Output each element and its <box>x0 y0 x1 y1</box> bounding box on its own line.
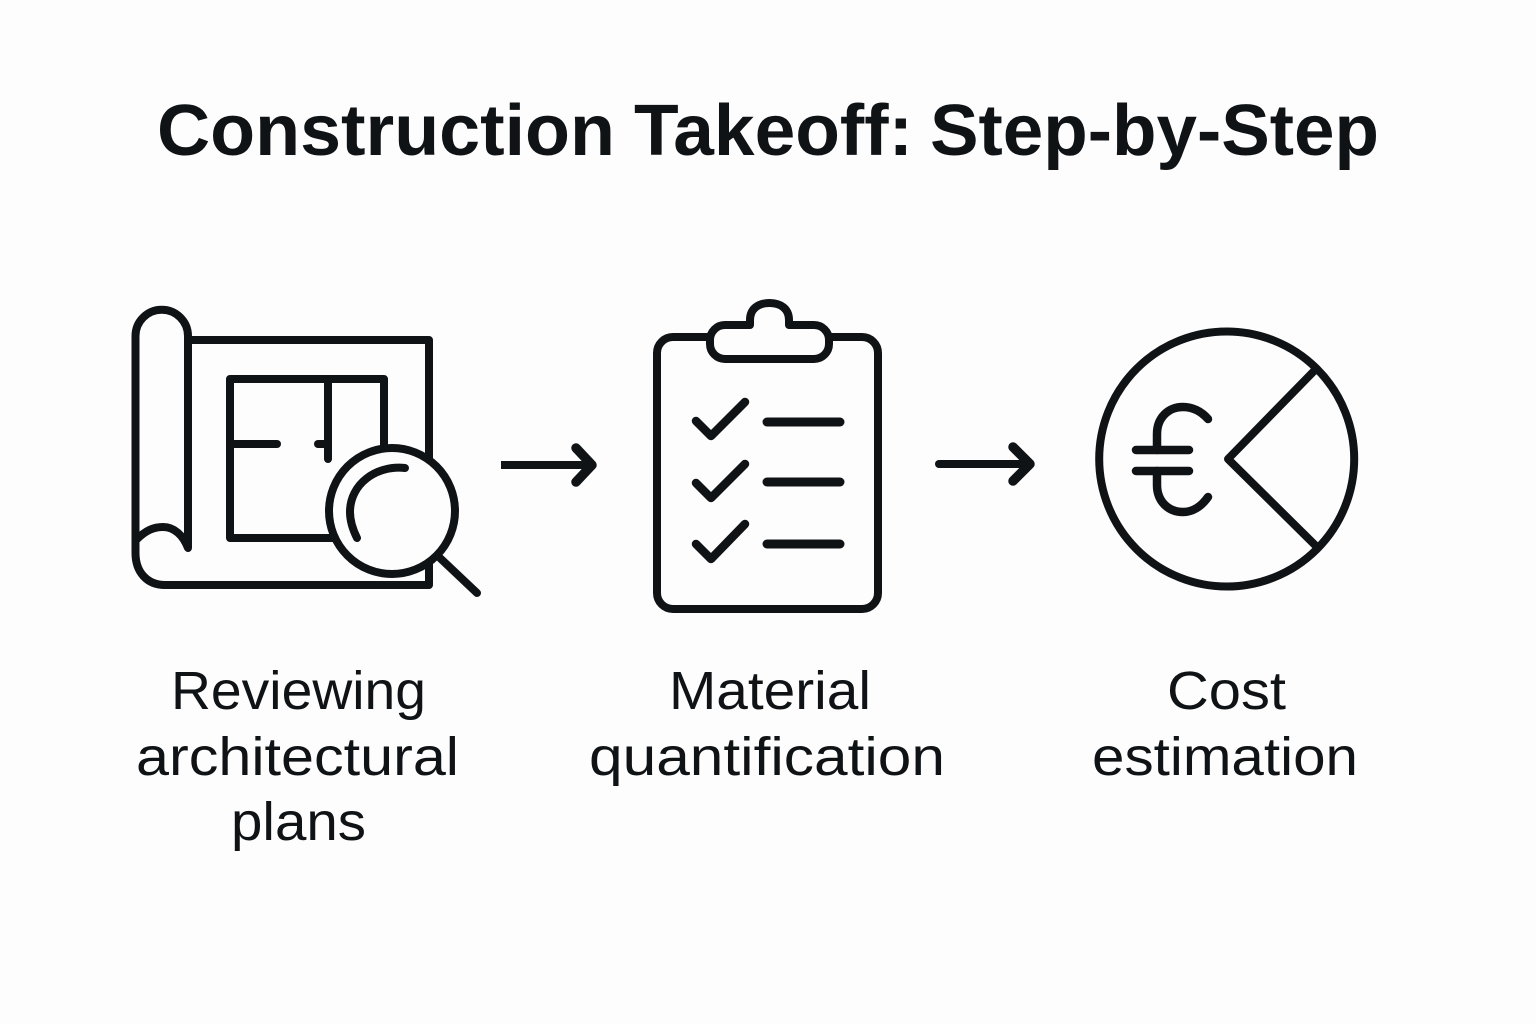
magnifying glass <box>329 448 477 593</box>
icon: euro pie chart <box>1099 332 1354 586</box>
icon: clipboard checklist <box>657 303 878 609</box>
title <box>157 91 1379 171</box>
label: cost estimation: Cost <box>1167 661 1286 721</box>
floor plan <box>230 379 384 538</box>
icon: blueprint with magnifying glass <box>136 310 477 593</box>
blueprint sheet and scroll <box>136 310 429 585</box>
label: reviewing architectural plans: plans <box>231 792 366 852</box>
label: material quantification <box>589 661 945 787</box>
label: material quantification: quantification <box>589 727 945 787</box>
arrow: step one to step two <box>501 448 592 482</box>
title: Takeoff: <box>634 91 913 171</box>
label: cost estimation <box>1092 661 1358 787</box>
label: reviewing architectural plans: Reviewing <box>171 661 426 721</box>
title: Construction <box>157 91 615 171</box>
pie chart <box>1099 332 1354 586</box>
label: material quantification: Material <box>669 661 871 721</box>
euro symbol <box>1136 407 1208 512</box>
clipboard body and clip <box>657 303 878 609</box>
label: reviewing architectural plans <box>136 661 459 852</box>
label: reviewing architectural plans: architectural <box>136 727 459 787</box>
label: cost estimation: estimation <box>1092 727 1358 787</box>
title: Step-by-Step <box>930 91 1379 171</box>
arrow: step two to step three <box>939 447 1030 481</box>
checklist rows <box>696 402 840 559</box>
